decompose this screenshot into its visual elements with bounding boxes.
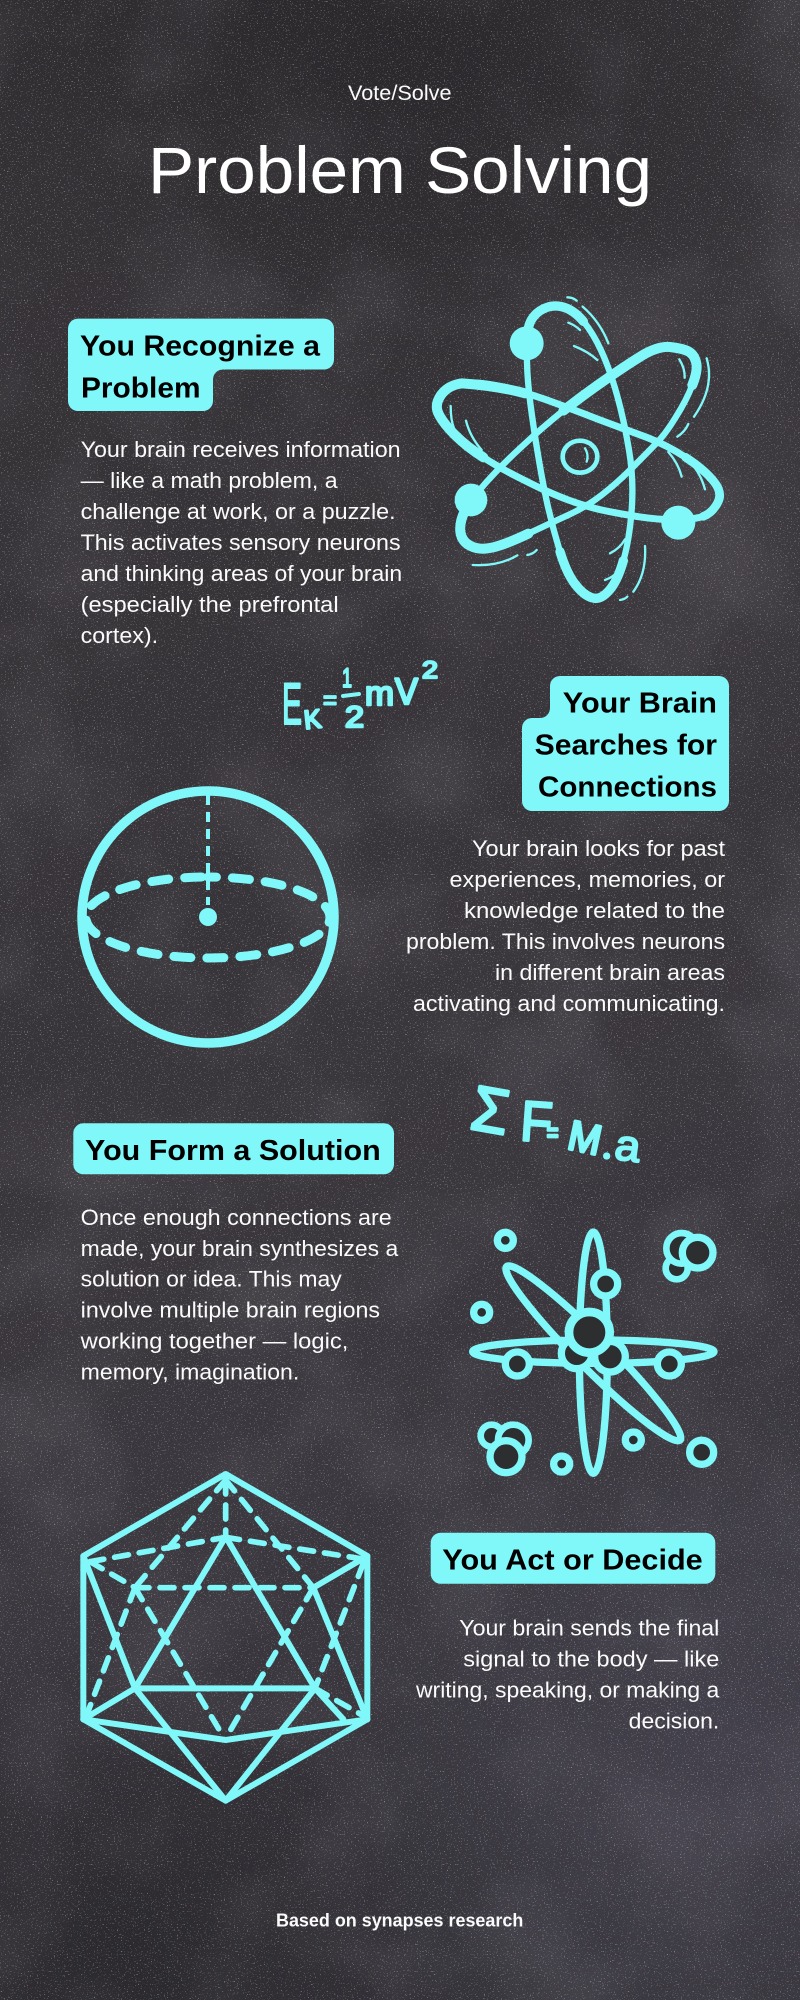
body text: solution or idea. This may xyxy=(81,1267,342,1292)
body text: Your brain looks for past xyxy=(472,836,725,861)
heading text xyxy=(80,331,321,405)
icon: sphere with dashed equator xyxy=(82,791,334,1043)
body text xyxy=(81,437,402,648)
heading shape xyxy=(431,1533,715,1584)
eyebrow: Vote/Solve: Vote/Solve xyxy=(348,82,452,105)
body text: signal to the body — like xyxy=(463,1647,719,1672)
body text: challenge at work, or a puzzle. xyxy=(81,499,396,524)
formula: force equation: Σ xyxy=(466,1073,515,1149)
formula: kinetic energy: K xyxy=(302,703,323,735)
heading text: Your Brain xyxy=(563,688,717,720)
formula: force equation xyxy=(466,1073,645,1172)
icon: icosahedron wireframe xyxy=(83,1474,367,1801)
heading shape xyxy=(68,319,334,411)
heading shape xyxy=(73,1123,394,1174)
body text: experiences, memories, or xyxy=(450,867,725,892)
body text: — like a math problem, a xyxy=(81,468,338,493)
formula: kinetic energy: E xyxy=(282,672,302,737)
heading shape xyxy=(522,676,729,811)
body text: Your brain sends the final xyxy=(459,1616,719,1641)
body text: cortex). xyxy=(81,623,158,648)
body text: writing, speaking, or making a xyxy=(415,1678,720,1703)
panel: you recognize a problem xyxy=(68,319,402,648)
icon: molecule atom with particles xyxy=(473,1232,714,1473)
icon: atom with three orbits xyxy=(437,297,720,600)
body text: made, your brain synthesizes a xyxy=(81,1236,399,1261)
panel: you form a solution xyxy=(73,1123,399,1384)
heading text: Searches for xyxy=(535,730,717,762)
body text: problem. This involves neurons xyxy=(406,929,725,954)
body text: Your brain receives information xyxy=(81,437,401,462)
footer source: Based on synapses research xyxy=(276,1911,523,1931)
body text: knowledge related to the xyxy=(464,898,725,923)
body text: and thinking areas of your brain xyxy=(81,561,402,586)
formula: force equation: M xyxy=(564,1111,606,1164)
formula: kinetic energy: 1 xyxy=(342,663,352,693)
body text: memory, imagination. xyxy=(81,1359,299,1384)
panel: your brain searches for connections xyxy=(406,676,729,1016)
formula: force equation: = xyxy=(547,1118,559,1148)
body text: involve multiple brain regions xyxy=(81,1298,380,1323)
body text: working together — logic, xyxy=(80,1329,348,1354)
body text xyxy=(415,1616,720,1734)
heading text: You Recognize a xyxy=(80,331,321,363)
formula: force equation: F xyxy=(518,1090,554,1155)
formula: force equation: a xyxy=(612,1121,645,1172)
heading text: You Act or Decide xyxy=(442,1544,703,1576)
formula: kinetic energy: 2 xyxy=(345,701,364,734)
heading text: You Form a Solution xyxy=(85,1135,381,1167)
heading text xyxy=(535,688,717,804)
body text: in different brain areas xyxy=(495,960,725,985)
formula: kinetic energy: V xyxy=(395,671,418,712)
title: Problem Solving xyxy=(148,133,652,207)
panel: you act or decide xyxy=(415,1533,720,1734)
formula: kinetic energy: 2 xyxy=(422,657,438,684)
heading text: Connections xyxy=(538,772,717,804)
formula: kinetic energy xyxy=(282,657,438,737)
heading text: Problem xyxy=(81,373,200,405)
body text: Once enough connections are xyxy=(81,1205,392,1230)
formula: kinetic energy: m xyxy=(365,675,394,713)
body text: This activates sensory neurons xyxy=(81,530,401,555)
formula: kinetic energy: = xyxy=(323,685,337,715)
body text xyxy=(406,836,725,1016)
body text: activating and communicating. xyxy=(413,991,725,1016)
body text: decision. xyxy=(629,1709,719,1734)
body text: (especially the prefrontal xyxy=(81,592,339,617)
body text xyxy=(80,1205,399,1384)
